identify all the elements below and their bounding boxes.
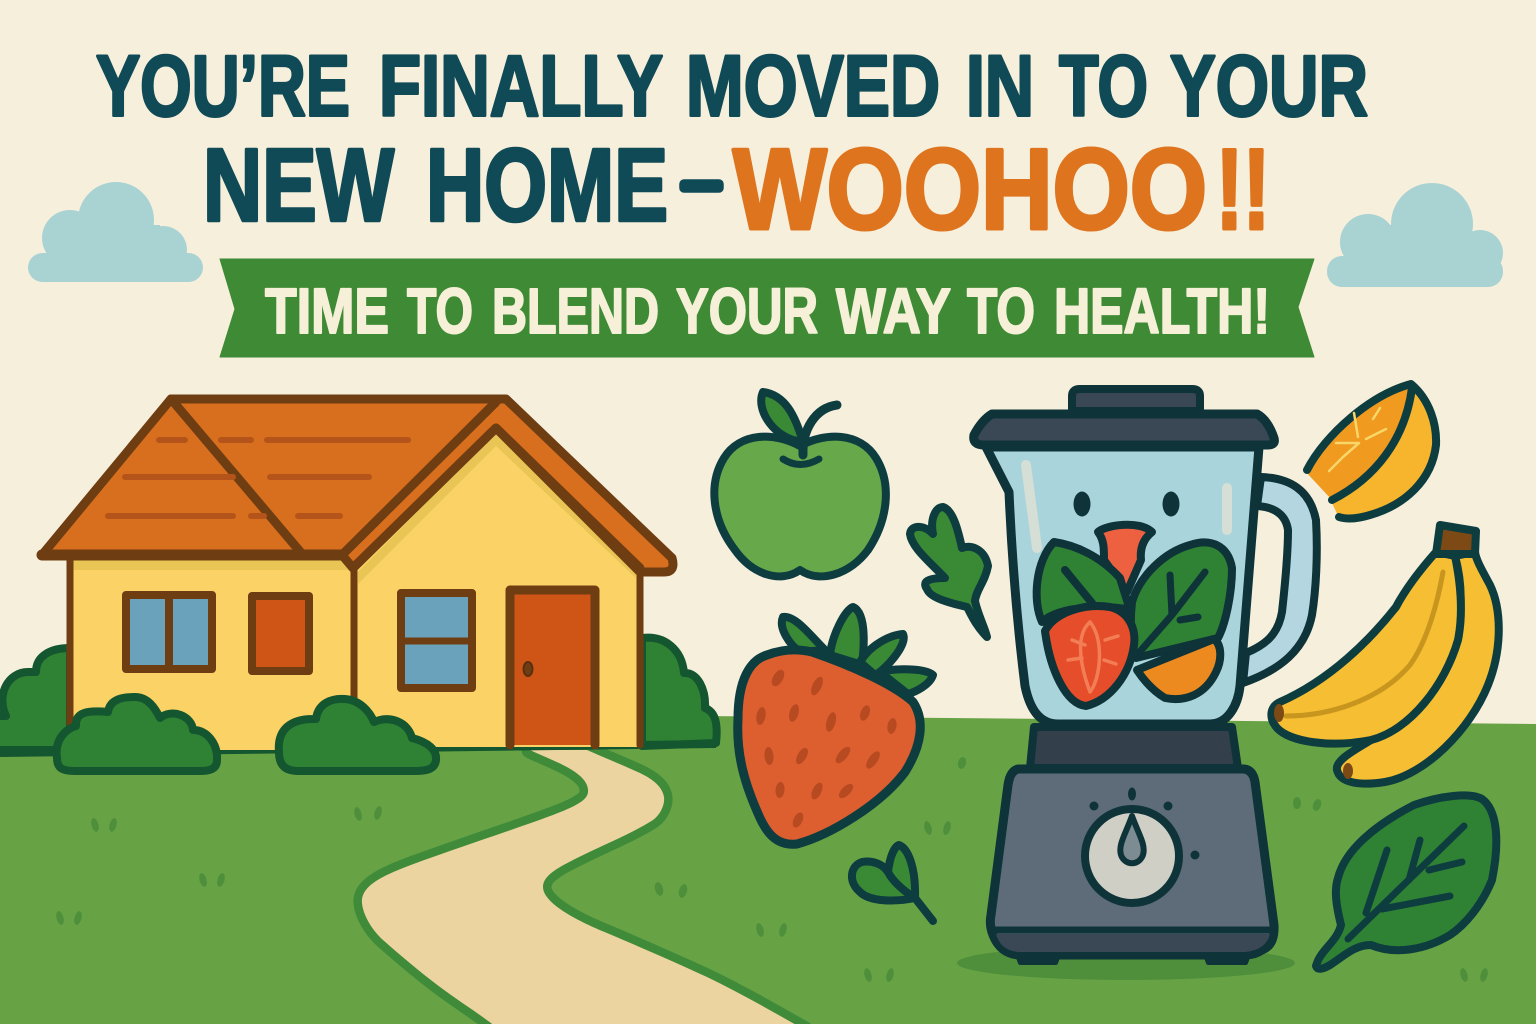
fruit: right leaf bbox=[1131, 542, 1232, 658]
roof bbox=[42, 399, 673, 572]
banana right bbox=[1337, 552, 1499, 784]
grass tufts bbox=[55, 756, 1489, 983]
front bush right bbox=[279, 699, 436, 771]
subtitle banner bbox=[220, 259, 1314, 357]
grass ground bbox=[0, 716, 1536, 1024]
icon: small leaf sprig bbox=[852, 845, 933, 921]
walls bbox=[70, 555, 354, 750]
bushes behind house bbox=[0, 638, 717, 750]
banner text bbox=[265, 275, 1270, 347]
icon: floating leaf bbox=[910, 507, 988, 637]
banner text: TO bbox=[967, 275, 1035, 347]
blender handle bbox=[1243, 477, 1317, 683]
door bbox=[510, 590, 595, 745]
title line 1 bbox=[96, 38, 1368, 134]
blender feet bbox=[1016, 952, 1250, 963]
banner text: TIME bbox=[265, 275, 389, 347]
title line 1: YOUR bbox=[1170, 38, 1368, 134]
banana left bbox=[1271, 552, 1461, 744]
fruit: red slice bbox=[1098, 525, 1152, 592]
strawberry leaves bbox=[782, 607, 933, 694]
winding path bbox=[362, 750, 805, 1024]
title line 2: HOME bbox=[426, 128, 668, 242]
banner text: TO bbox=[407, 275, 473, 347]
strawberry seeds bbox=[755, 668, 898, 829]
front bush left bbox=[57, 697, 217, 771]
house bbox=[42, 399, 673, 750]
title exclamation: WOOHOO bbox=[733, 126, 1207, 254]
jar highlights bbox=[1026, 465, 1227, 548]
banana stem bbox=[1436, 525, 1476, 554]
blender dial bbox=[1085, 788, 1200, 903]
title line 1: TO bbox=[1059, 38, 1148, 134]
roof shingle lines bbox=[108, 440, 408, 516]
banana tips bbox=[1274, 704, 1284, 722]
fruit: orange slice bbox=[1137, 639, 1220, 699]
icon: orange wedge bbox=[1305, 384, 1436, 519]
banner text: BLEND bbox=[492, 275, 659, 347]
icon: bananas bbox=[1271, 525, 1499, 784]
window middle bbox=[252, 596, 309, 671]
icon: green apple bbox=[714, 392, 886, 576]
icon: spinach leaf bbox=[1316, 795, 1496, 969]
title bbox=[96, 38, 1368, 254]
title line 2 bbox=[203, 128, 722, 242]
cloud right bbox=[1327, 183, 1503, 287]
window left bbox=[126, 595, 212, 669]
blender eyes bbox=[1074, 492, 1180, 516]
blender collar bbox=[1030, 727, 1238, 768]
fruit: left leaf bbox=[1037, 542, 1130, 622]
blender lid knob bbox=[1072, 389, 1200, 411]
window right bbox=[401, 593, 472, 688]
title line 2: NEW bbox=[203, 128, 395, 242]
ground line bbox=[0, 744, 716, 753]
icon: strawberry bbox=[738, 607, 933, 844]
banner text: WAY bbox=[836, 275, 951, 347]
title line 1: IN bbox=[966, 38, 1034, 134]
title exclamation: !! bbox=[1216, 126, 1270, 254]
cloud left bbox=[28, 182, 203, 282]
icon: blender bbox=[974, 389, 1317, 963]
title line 1: MOVED bbox=[686, 38, 940, 134]
blender shadow bbox=[957, 946, 1295, 980]
blender jar bbox=[986, 447, 1259, 724]
title line 1: YOU’RE bbox=[96, 38, 350, 134]
blender lid bbox=[974, 414, 1274, 445]
fruit: strawberry half bbox=[1045, 606, 1134, 706]
title line 1: FINALLY bbox=[379, 38, 663, 134]
banana ridge bbox=[1286, 572, 1443, 716]
banner text: HEALTH! bbox=[1054, 275, 1270, 347]
blender base bbox=[990, 769, 1274, 955]
banner text: YOUR bbox=[676, 275, 818, 347]
